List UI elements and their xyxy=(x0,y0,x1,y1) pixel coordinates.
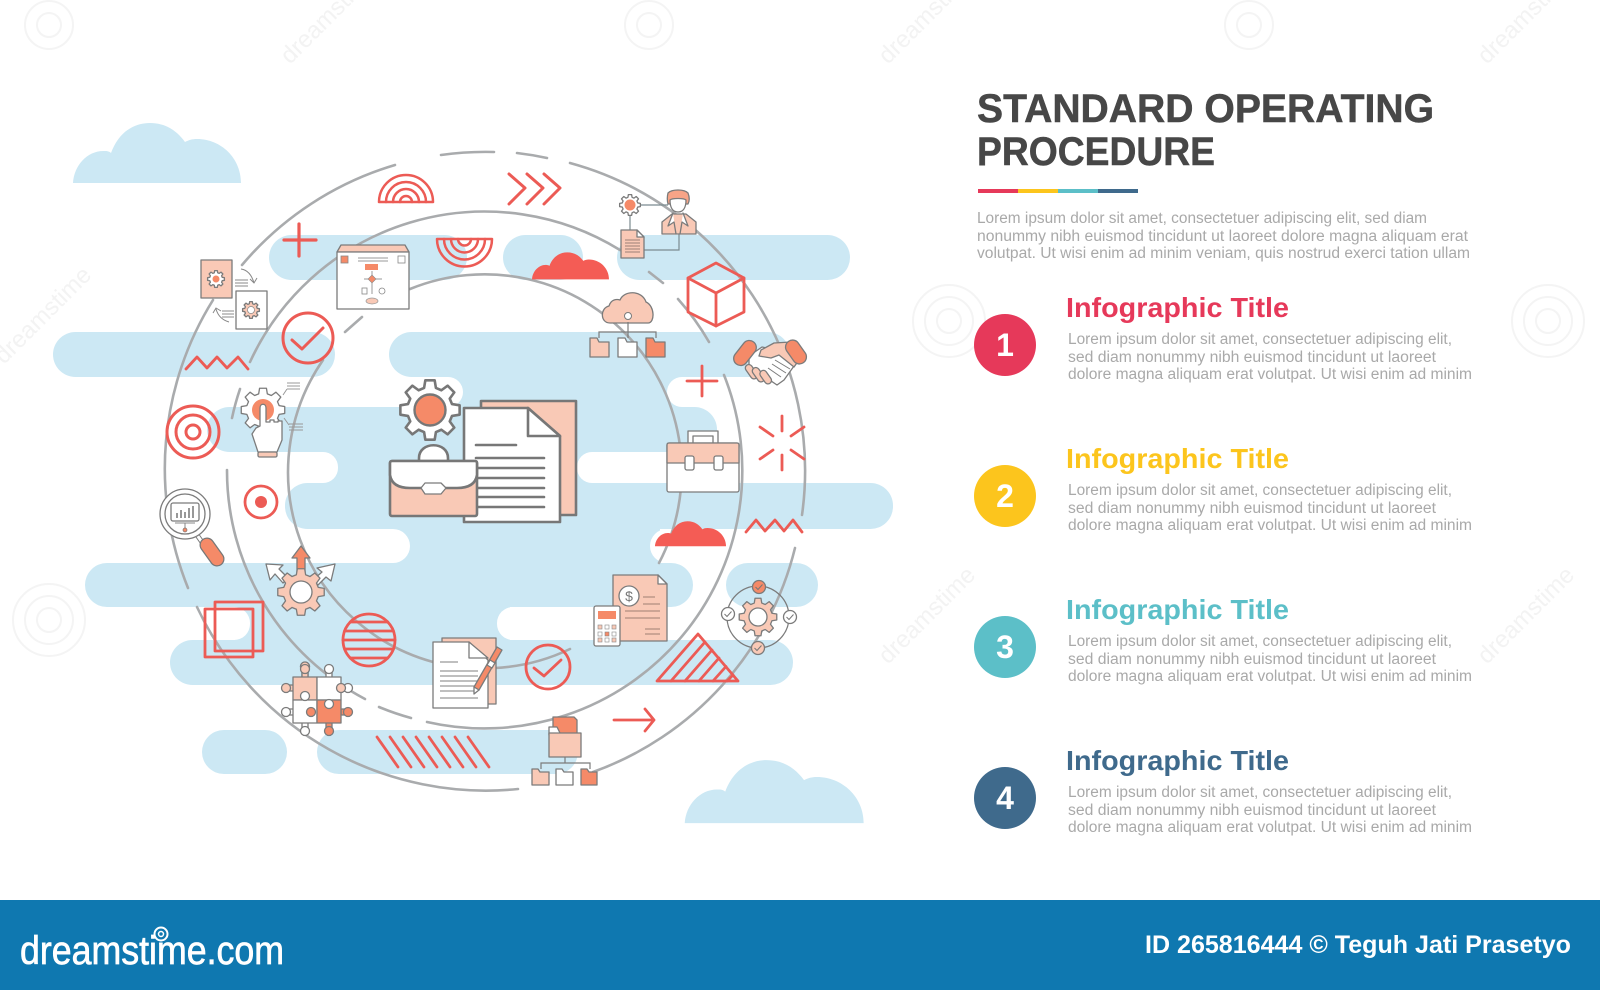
item 4: 4 xyxy=(996,780,1014,816)
icon: puzzle pieces xyxy=(282,662,352,736)
item 1 xyxy=(974,292,1472,383)
back document xyxy=(481,401,576,515)
briefcase xyxy=(390,461,477,516)
person head arch xyxy=(419,445,448,462)
icon: zigzag left xyxy=(186,357,248,369)
title xyxy=(977,87,1434,174)
item 3 xyxy=(974,594,1472,685)
footer credit: ID 265816444 © Teguh Jati Prasetyo xyxy=(1145,931,1571,959)
item 3: sed diam nonummy nibh euismod tincidunt ut laoreet xyxy=(1068,651,1437,668)
item 1: Infographic Title xyxy=(1066,292,1289,323)
icon: bill and calculator xyxy=(594,575,667,646)
item 2: dolore magna aliquam erat volutpat. Ut wisi enim ad minim xyxy=(1068,517,1472,534)
icon: red cloud lower xyxy=(655,521,726,546)
icon: cube xyxy=(688,263,744,326)
icon: target dot xyxy=(245,486,277,518)
intro text: nonummy nibh euismod tincidunt ut laoreet dolore magna aliquam erat xyxy=(977,228,1469,245)
item 3: dolore magna aliquam erat volutpat. Ut wisi enim ad minim xyxy=(1068,668,1472,685)
item 1: dolore magna aliquam erat volutpat. Ut wisi enim ad minim xyxy=(1068,366,1472,383)
background: blue pill shapes xyxy=(53,235,893,774)
icon: gear documents exchange xyxy=(201,260,267,329)
icon: arrow right xyxy=(614,709,654,731)
icon: folder tree xyxy=(532,717,597,785)
cloud: bottom right blue xyxy=(685,760,864,823)
icon: hatched triangle xyxy=(657,634,738,681)
icon: plus large xyxy=(284,224,316,256)
icon: striped circle xyxy=(343,614,395,666)
item 4: Infographic Title xyxy=(1066,745,1289,776)
icon: handshake xyxy=(731,337,809,385)
icon: triple chevron xyxy=(509,174,560,204)
item 4: sed diam nonummy nibh euismod tincidunt ut laoreet xyxy=(1068,802,1437,819)
icon: plus small xyxy=(687,366,717,396)
icon: bill and calculator: $ xyxy=(625,588,633,604)
item 1: 1 xyxy=(996,327,1014,363)
item 2: Lorem ipsum dolor sit amet, consectetuer adipiscing elit, xyxy=(1068,482,1452,499)
item 3: 3 xyxy=(996,629,1014,665)
gear xyxy=(400,380,460,440)
item 4: Lorem ipsum dolor sit amet, consectetuer adipiscing elit, xyxy=(1068,784,1452,801)
title: PROCEDURE xyxy=(977,130,1215,174)
icon: target rings xyxy=(167,406,219,458)
icon: gear with arrows xyxy=(266,546,335,615)
text: dreamstime xyxy=(1472,561,1580,669)
icon: flowchart window xyxy=(337,245,409,309)
cloud: top left blue xyxy=(73,123,241,183)
item 2: sed diam nonummy nibh euismod tincidunt ut laoreet xyxy=(1068,500,1437,517)
icon: burst xyxy=(760,416,804,470)
text: dreamstime xyxy=(873,561,981,669)
icon: check circle small xyxy=(526,645,570,689)
icon: briefcase right xyxy=(667,431,739,492)
item 1: Lorem ipsum dolor sit amet, consectetuer adipiscing elit, xyxy=(1068,331,1452,348)
item 2 xyxy=(974,443,1472,534)
footer band xyxy=(0,900,1600,990)
item 2: 2 xyxy=(996,478,1014,514)
title: STANDARD OPERATING xyxy=(977,87,1434,131)
icon: document with pen xyxy=(433,638,502,708)
icon: rainbow half circle top xyxy=(379,175,433,202)
icon: person gear document xyxy=(620,190,696,258)
item 2: Infographic Title xyxy=(1066,443,1289,474)
icon: half circle down xyxy=(437,239,492,266)
footer logo: dreamstime.com xyxy=(20,929,284,973)
icon: zigzag right xyxy=(746,520,802,532)
icon: overlapping squares xyxy=(205,602,263,657)
icon: hand pressing gear xyxy=(241,383,303,457)
item 4 xyxy=(974,745,1472,836)
icon: red cloud top xyxy=(532,252,609,279)
icon: diagonal hatch xyxy=(377,737,489,767)
front document xyxy=(464,408,560,522)
icon: check circle large xyxy=(283,313,333,363)
icon: gear with orbit checks xyxy=(722,580,796,654)
item 4: dolore magna aliquam erat volutpat. Ut wisi enim ad minim xyxy=(1068,819,1472,836)
intro text: volutpat. Ut wisi enim ad minim veniam, quis nostrud exerci tation ullam xyxy=(977,245,1470,262)
item 3: Lorem ipsum dolor sit amet, consectetuer adipiscing elit, xyxy=(1068,633,1452,650)
icon: cloud with folders xyxy=(590,293,665,357)
central illustration: gear, briefcase and documents xyxy=(390,380,576,522)
intro text: Lorem ipsum dolor sit amet, consectetuer adipiscing elit, sed diam xyxy=(977,210,1427,227)
item 1: sed diam nonummy nibh euismod tincidunt ut laoreet xyxy=(1068,349,1437,366)
intro text xyxy=(977,210,1470,262)
icon: magnifier with chart xyxy=(160,489,217,559)
item 3: Infographic Title xyxy=(1066,594,1289,625)
concentric dashed rings xyxy=(165,152,805,791)
title colour bar xyxy=(978,189,1138,193)
